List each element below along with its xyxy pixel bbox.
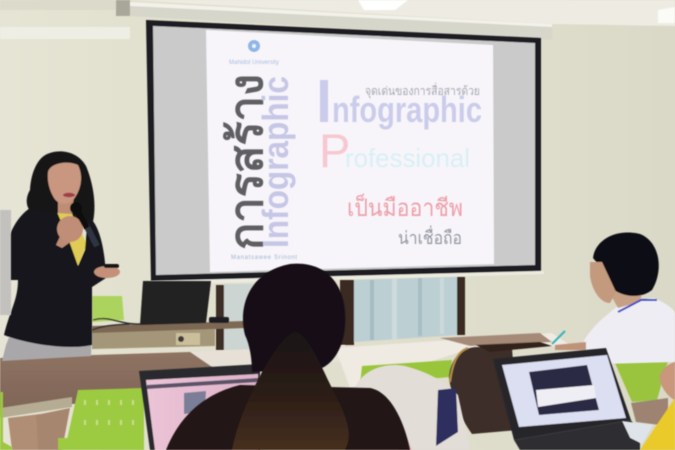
top bar bbox=[147, 378, 258, 389]
screen frame bbox=[146, 20, 541, 281]
rotated heading: Infographic: Infographic bbox=[255, 76, 296, 248]
remote on table bbox=[209, 317, 229, 323]
grey screen surface bbox=[153, 26, 535, 275]
keyboard base bbox=[514, 420, 640, 450]
lid bbox=[493, 348, 631, 440]
lid bbox=[139, 364, 260, 450]
slide content bbox=[220, 40, 482, 261]
laptop display bbox=[502, 355, 626, 427]
yellow blouse bbox=[57, 213, 87, 266]
right table surface bbox=[631, 398, 668, 426]
logo caption: Mahidol University bbox=[229, 60, 279, 66]
bag strap bbox=[450, 348, 468, 382]
rest of the word: nfographic bbox=[332, 89, 482, 130]
mouth bbox=[63, 193, 75, 197]
main wooden table bbox=[0, 352, 212, 416]
slide Thai line in grey: น่าเชื่อถือ bbox=[398, 225, 462, 248]
jacket bbox=[355, 365, 470, 450]
skirt bbox=[2, 330, 92, 361]
ponytail bbox=[232, 332, 349, 450]
pink cloth bbox=[398, 418, 412, 450]
face bbox=[48, 163, 81, 204]
hand bbox=[660, 362, 675, 400]
slide Thai line in red: เป็นมืออาชีพ bbox=[347, 193, 463, 222]
forearm and pen bbox=[552, 331, 586, 350]
white shirt bbox=[581, 298, 675, 364]
phone and yellow sleeve at bottom right bbox=[622, 362, 675, 450]
chair centre bbox=[58, 388, 144, 450]
bag opening bbox=[476, 342, 552, 352]
chair back holes bbox=[84, 400, 134, 425]
display dark panel bbox=[529, 365, 599, 415]
legs bbox=[8, 408, 70, 450]
chair right bbox=[615, 361, 668, 402]
laptop on table bbox=[140, 281, 211, 325]
slide word: P: P bbox=[319, 124, 350, 177]
presenter bbox=[2, 151, 120, 450]
large initial I bbox=[320, 80, 328, 122]
table edge bbox=[0, 397, 72, 418]
blue lanyard bbox=[618, 300, 657, 312]
hair bbox=[27, 151, 94, 226]
screen thumbnail bbox=[184, 391, 206, 414]
hair bbox=[593, 232, 659, 296]
handbag bbox=[449, 342, 552, 434]
head of hair bbox=[243, 264, 345, 372]
right hand with presenter remote bbox=[94, 264, 120, 278]
presenter table bbox=[92, 321, 245, 349]
face bbox=[590, 262, 616, 303]
neck bbox=[608, 284, 644, 308]
display light box bbox=[536, 385, 596, 407]
yellow sleeve bbox=[640, 398, 675, 450]
cables bbox=[92, 319, 140, 330]
green chair behind table bbox=[92, 296, 124, 322]
white slide bbox=[206, 30, 494, 272]
white jacket on chair bbox=[355, 365, 470, 450]
arm to hand bbox=[56, 232, 76, 248]
chair left bbox=[0, 392, 12, 450]
neck bbox=[58, 195, 74, 216]
right laptop bbox=[493, 348, 640, 450]
left laptop bbox=[139, 364, 260, 450]
black blazer bbox=[4, 208, 106, 347]
bag body bbox=[449, 347, 518, 434]
scarf bbox=[436, 388, 458, 446]
presenter name: Manatsawee Srinont bbox=[231, 255, 297, 261]
foreground attendee head from behind bbox=[166, 264, 410, 450]
screen lower edge bbox=[151, 271, 544, 285]
front green chairs bbox=[0, 360, 668, 450]
ceiling and top trim bbox=[0, 0, 675, 40]
slide word: Infographic bbox=[320, 80, 482, 130]
slide word: rofessional: rofessional bbox=[345, 143, 470, 173]
chair behind audience bbox=[360, 360, 452, 385]
dark sweater bbox=[166, 385, 410, 450]
rotated heading: Thai: การสร้าง bbox=[220, 74, 272, 250]
phone bbox=[622, 421, 653, 444]
slide subtitle: Thai: จุดเด่นของการสื่อสารด้วย bbox=[365, 82, 480, 99]
microphone bbox=[70, 202, 97, 246]
projection screen bbox=[146, 20, 544, 285]
wooden frame posts bbox=[216, 277, 465, 350]
right white table bbox=[190, 345, 345, 368]
seated attendee at right bbox=[552, 232, 675, 364]
window and curtains below the screen bbox=[216, 277, 465, 350]
logo: university seal bbox=[248, 40, 260, 52]
flipchart stand at left bbox=[0, 210, 11, 315]
screen bbox=[146, 374, 258, 450]
back tables and lectern bbox=[92, 281, 570, 388]
hand holding microphone bbox=[57, 216, 83, 242]
curtain bbox=[354, 277, 457, 342]
window: left pane bbox=[224, 284, 254, 350]
